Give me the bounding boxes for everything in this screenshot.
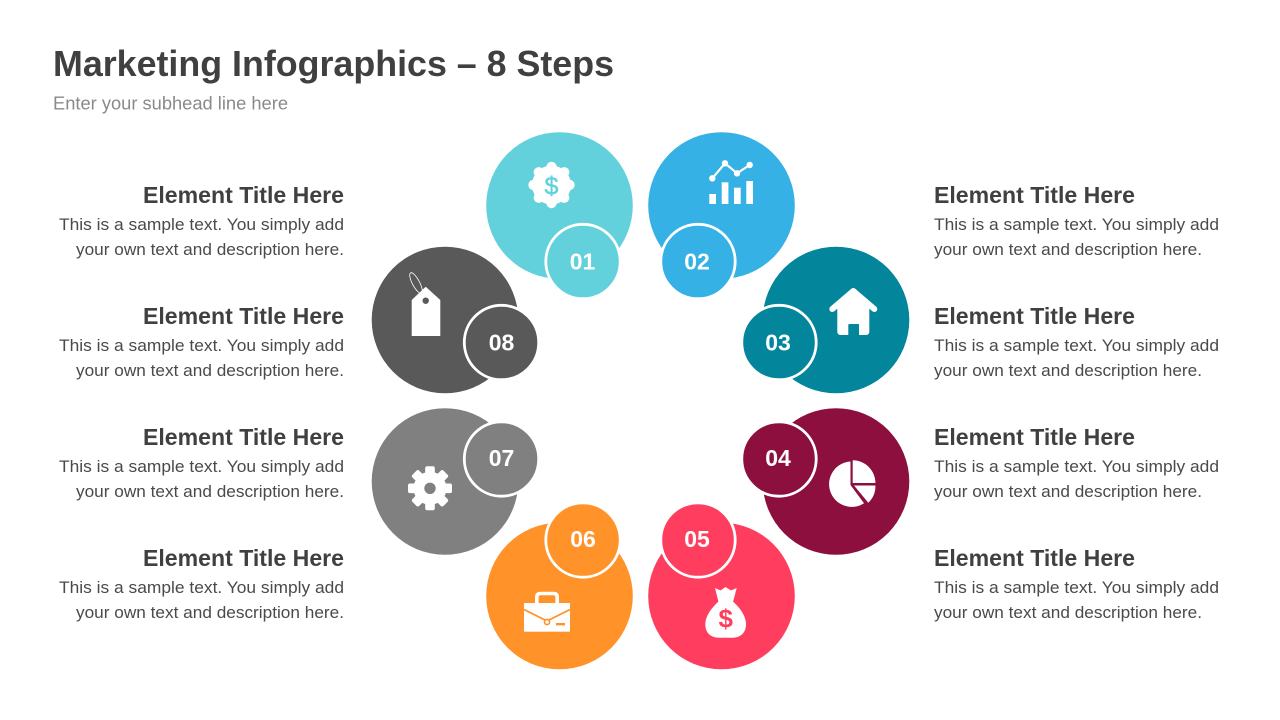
text block: right row 3: Element Title Here — [934, 424, 1135, 450]
text block: right row 1: This is a sample text. You simply add — [934, 216, 1219, 234]
text block: right row 2: your own text and description here. — [934, 362, 1202, 380]
text block: left row 4: your own text and description here. — [76, 604, 344, 622]
badge: 03 — [742, 305, 816, 380]
title: Marketing Infographics – 8 Steps — [53, 43, 614, 84]
text block: right row 4: your own text and description here. — [934, 604, 1202, 622]
text block: left row 4 — [59, 545, 344, 622]
badge: 08 — [464, 305, 539, 380]
badge: 03: 03 — [765, 330, 791, 356]
text block: right row 3 — [934, 424, 1219, 501]
badge: 01 — [546, 224, 620, 299]
text block: left row 3: This is a sample text. You simply add — [59, 458, 344, 476]
text block: right row 2 — [934, 303, 1219, 380]
text block: left row 3: Element Title Here — [143, 424, 344, 450]
icon: money bag: $ — [718, 604, 733, 634]
text block: left row 1: This is a sample text. You simply add — [59, 216, 344, 234]
badge: 08: 08 — [489, 330, 514, 356]
text block: left row 2 — [59, 303, 344, 380]
text block: right row 3: your own text and description here. — [934, 483, 1202, 501]
text block: right row 4 — [934, 545, 1219, 622]
text block: left row 1: your own text and description here. — [76, 241, 344, 259]
badge: 05: 05 — [684, 526, 710, 552]
text block: left row 4: This is a sample text. You simply add — [59, 579, 344, 597]
text block: right row 2: This is a sample text. You simply add — [934, 337, 1219, 355]
panel: step 08 — [372, 247, 539, 393]
panel: step 03 — [742, 247, 909, 393]
text block: left row 1 — [59, 182, 344, 259]
panel: step 04 — [742, 408, 909, 555]
badge: 01: 01 — [570, 248, 595, 274]
text block: right row 2: Element Title Here — [934, 303, 1135, 329]
text block: right row 1 — [934, 182, 1219, 259]
subhead: Enter your subhead line here — [53, 94, 288, 114]
panel: step 01 — [486, 132, 633, 299]
badge: 07 — [464, 422, 539, 496]
badge: 04 — [742, 422, 816, 496]
badge: 05 — [661, 503, 735, 577]
icon: money bag — [705, 587, 746, 638]
panel: step 05 — [648, 503, 795, 669]
text block: left row 2: your own text and description here. — [76, 362, 344, 380]
panel: step 02 — [648, 132, 795, 299]
icon: price tag — [407, 271, 440, 336]
text block: left row 4: Element Title Here — [143, 545, 344, 571]
badge: 07: 07 — [489, 445, 514, 471]
badge: 02: 02 — [684, 248, 710, 274]
panel: step 06 — [486, 503, 633, 669]
text block: right row 4: Element Title Here — [934, 545, 1135, 571]
text block: left row 2: Element Title Here — [143, 303, 344, 329]
text block: left row 3: your own text and description here. — [76, 483, 344, 501]
text block: right row 3: This is a sample text. You simply add — [934, 458, 1219, 476]
text block: right row 1: Element Title Here — [934, 182, 1135, 208]
icon: gear — [408, 466, 452, 510]
icon: house — [832, 290, 874, 335]
text block: left row 1: Element Title Here — [143, 182, 344, 208]
icon: dollar gear — [528, 162, 575, 208]
panel: step 07 — [372, 408, 539, 555]
icon: dollar gear: $ — [545, 172, 559, 200]
badge: 04: 04 — [765, 445, 791, 471]
icon: pie chart — [829, 460, 875, 507]
text block: left row 3 — [59, 424, 344, 501]
badge: 06 — [546, 503, 620, 577]
text block: right row 4: This is a sample text. You simply add — [934, 579, 1219, 597]
badge: 06: 06 — [570, 526, 596, 552]
text block: left row 2: This is a sample text. You simply add — [59, 337, 344, 355]
text block: right row 1: your own text and description here. — [934, 241, 1202, 259]
icon: bar and line chart — [709, 160, 753, 204]
icon: briefcase — [524, 594, 570, 632]
badge: 02 — [661, 224, 735, 299]
